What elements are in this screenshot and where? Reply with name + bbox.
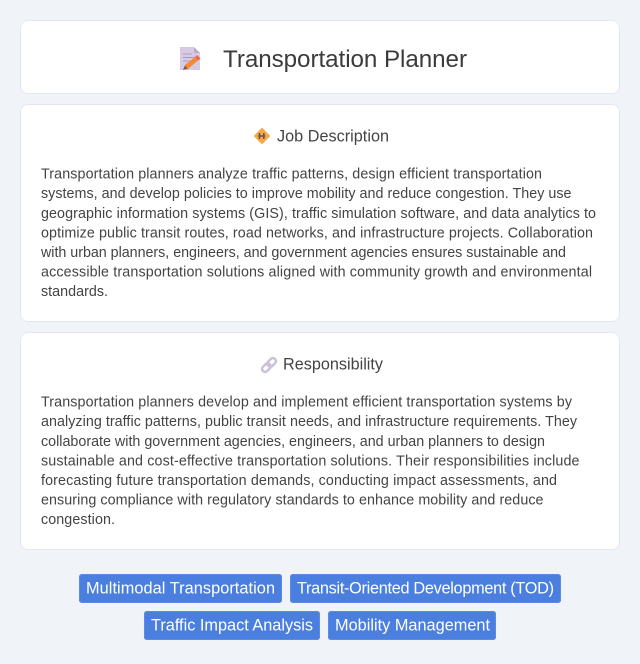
- text block: job description: standards.: [41, 284, 108, 300]
- icon: document with pencil: [180, 47, 200, 70]
- text block: job description: optimize public transit routes, road networks, and infrastructure projects. Collaboration: [41, 225, 593, 241]
- tag: multimodal transportation: [79, 574, 282, 603]
- title: Transportation Planner: [223, 46, 467, 73]
- tag: multimodal transportation: Multimodal Transportation: [86, 580, 275, 598]
- text block: job description: with urban planners, engineers, and government agencies ensures sustainable and: [40, 245, 566, 261]
- tag: transit-oriented development: [290, 574, 561, 603]
- tag: mobility management: Mobility Management: [335, 617, 490, 635]
- text block: responsibility: sustainable and cost-effective transportation solutions. Their responsibilities include: [41, 453, 580, 469]
- text block: job description: geographic information systems (GIS), traffic simulation software, and data analytics to: [41, 206, 596, 222]
- text block: responsibility: collaborate with government agencies, engineers, and urban planners to design: [41, 434, 545, 450]
- text block: responsibility: forecasting future transportation demands, conducting impact assessments, and: [41, 473, 557, 489]
- tag: traffic impact analysis: Traffic Impact Analysis: [151, 617, 313, 635]
- icon: chain link: [260, 356, 278, 374]
- text block: responsibility: analyzing traffic patterns, public transit needs, and infrastructure requirements. They: [41, 414, 578, 430]
- icon: road sign diamond: [254, 128, 270, 144]
- text block: job description: [40, 167, 596, 300]
- tag: traffic impact analysis: [144, 611, 320, 640]
- text block: job description: accessible transportation solutions aligned with community growth and environmental: [41, 265, 592, 281]
- text block: responsibility: Transportation planners develop and implement efficient transportation systems by: [41, 395, 573, 411]
- panel: job description: [20, 104, 620, 322]
- heading: job description: Job Description: [277, 128, 389, 146]
- text block: job description: systems, and develop policies to improve mobility and reduce congestion. They use: [41, 186, 572, 202]
- text block: job description: Transportation planners analyze traffic patterns, design efficient transportation: [41, 167, 542, 183]
- panel: title card: [20, 20, 620, 94]
- panel: responsibility: [20, 332, 620, 550]
- heading: responsibility: Responsibility: [283, 356, 384, 374]
- text block: responsibility: congestion.: [41, 512, 115, 528]
- tag: mobility management: [328, 611, 496, 640]
- text block: responsibility: ensuring compliance with regulatory standards to enhance mobility and reduce: [41, 493, 544, 509]
- tag: transit-oriented development: Transit-Oriented Development (TOD): [297, 580, 554, 598]
- text block: responsibility: [41, 395, 580, 528]
